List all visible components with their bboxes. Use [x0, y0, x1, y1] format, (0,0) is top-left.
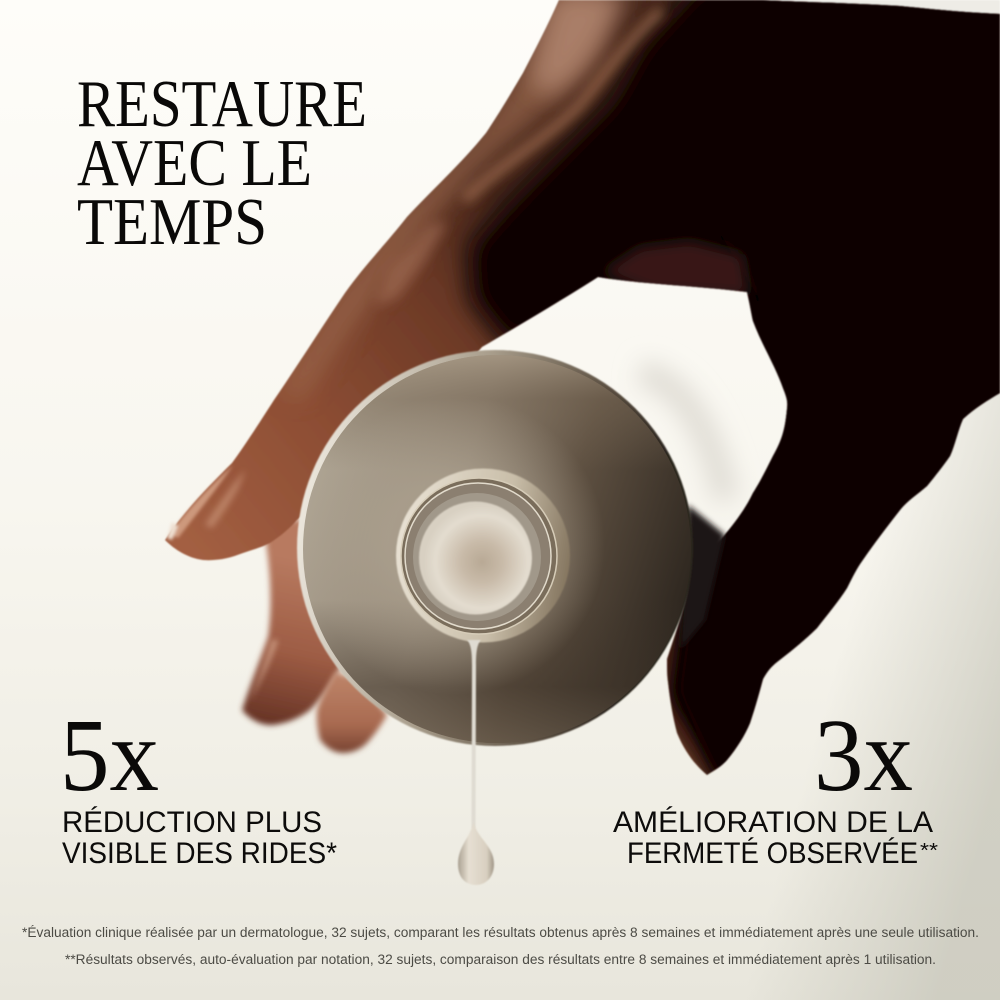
hand silhouette with shading: [164, 0, 1000, 776]
stat: 5x wrinkle reduction: [60, 698, 337, 870]
title: RESTAURE: [77, 67, 367, 141]
stat caption right: [613, 806, 938, 870]
stat caption left: [62, 806, 337, 870]
photo: hand holding bottle: [164, 0, 1000, 885]
footnotes: **Résultats observés, auto-évaluation par notation, 32 sujets, comparaison des résultats entre 8 semaines et immédiatement après 1 utilisation.: [65, 952, 936, 967]
stat caption right: FERMETÉ OBSERVÉE: [627, 837, 918, 870]
highlight on middle finger: [250, 640, 278, 702]
top knuckle patch: [530, 0, 630, 95]
footnotes: *Évaluation clinique réalisée par un dermatologue, 32 sujets, comparant les résultats obtenus après 8 semaines et immédiatement après une seule utilisation.: [22, 925, 979, 940]
nozzle: [419, 502, 532, 614]
solid dark core: [680, 0, 1000, 790]
index finger tip details: [167, 465, 245, 540]
shadow behind the disc: [680, 505, 725, 650]
fingernail: [170, 465, 233, 538]
lit upper band: [280, 0, 610, 400]
ring finger: [317, 672, 387, 753]
finger highlight: [205, 470, 245, 528]
stat caption right: **: [920, 840, 938, 862]
title: AVEC LE: [77, 126, 312, 200]
stat caption right: AMÉLIORATION DE LA: [613, 806, 933, 839]
title: TEMPS: [77, 185, 267, 259]
stat number 3x: 3x: [814, 698, 913, 813]
palm underside: [604, 242, 748, 295]
cap with rings: [396, 468, 570, 642]
middle finger: [242, 520, 345, 725]
stat number 5x: 5x: [60, 698, 159, 813]
shaded side of the hand: [468, 0, 1000, 790]
knuckle wrinkles: [375, 222, 448, 305]
bottle end disc: [297, 350, 693, 746]
stat caption left: RÉDUCTION PLUS: [62, 806, 322, 839]
title: [77, 67, 367, 259]
stat: 3x firmness improvement: [613, 698, 938, 870]
stat caption left: VISIBLE DES RIDES*: [62, 837, 337, 870]
bright crease streak: [465, 10, 662, 200]
light strip at top right of hand: [725, 0, 1000, 16]
footnotes: [22, 925, 979, 967]
serum drop: [458, 822, 494, 885]
dripping serum thread: [467, 640, 481, 828]
bottle cylinder shadow band: [640, 372, 726, 500]
